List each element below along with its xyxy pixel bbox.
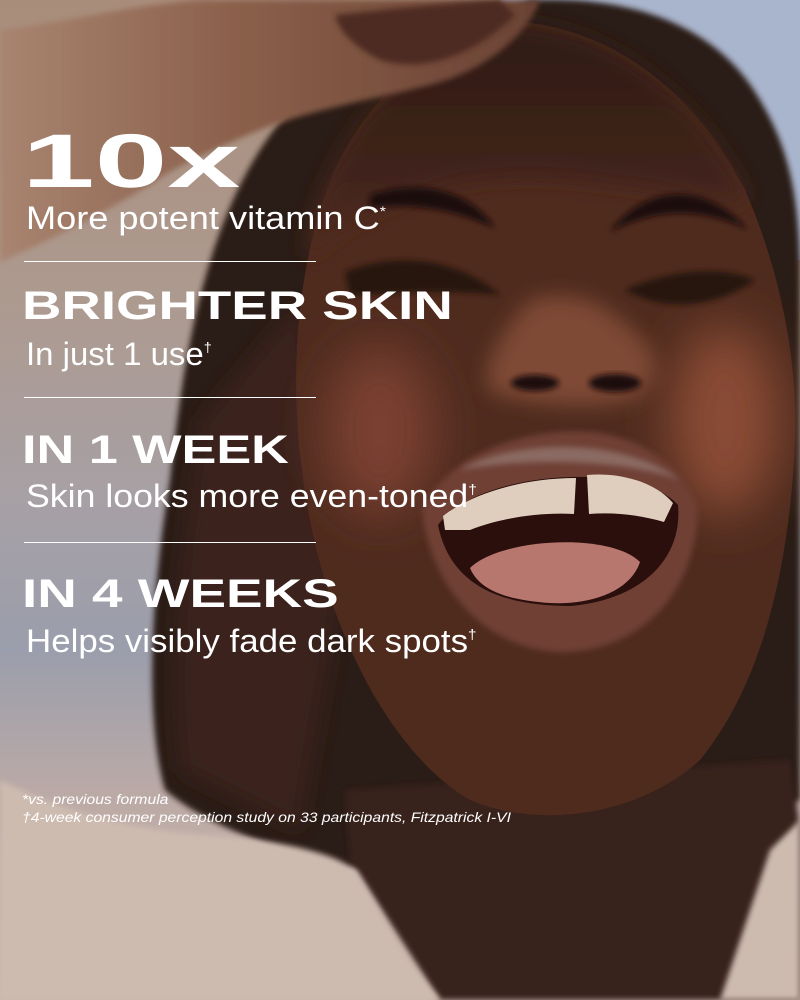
divider [24,542,316,543]
eyes [345,260,500,296]
arm and fist [0,0,540,262]
tongue [470,542,640,603]
heading: in 1 week: IN 1 WEEK [22,428,289,472]
teeth [443,474,673,530]
divider [24,397,316,398]
heading: brighter skin: BRIGHTER SKIN [22,284,453,328]
stat: 10x: 10x [22,119,240,204]
footnotes [22,791,511,825]
heading: in 4 weeks: IN 4 WEEKS [22,572,339,616]
text: skin looks more even-toned: Skin looks more even-toned† [26,478,477,514]
shirt [0,780,440,1000]
hair [152,0,800,870]
mouth [422,432,697,652]
eyebrows [370,187,495,228]
face [296,22,795,815]
text: more potent vitamin C: More potent vitamin C* [26,200,386,236]
footnotes: *vs. previous formula [22,791,168,807]
neck [345,760,800,1000]
footnotes: †4-week consumer perception study on 33 participants, Fitzpatrick I-VI [22,809,511,825]
divider [24,261,316,262]
nose [487,296,655,405]
text: in just 1 use: In just 1 use† [26,336,212,372]
text: helps visibly fade dark spots: Helps visibly fade dark spots† [26,623,477,659]
